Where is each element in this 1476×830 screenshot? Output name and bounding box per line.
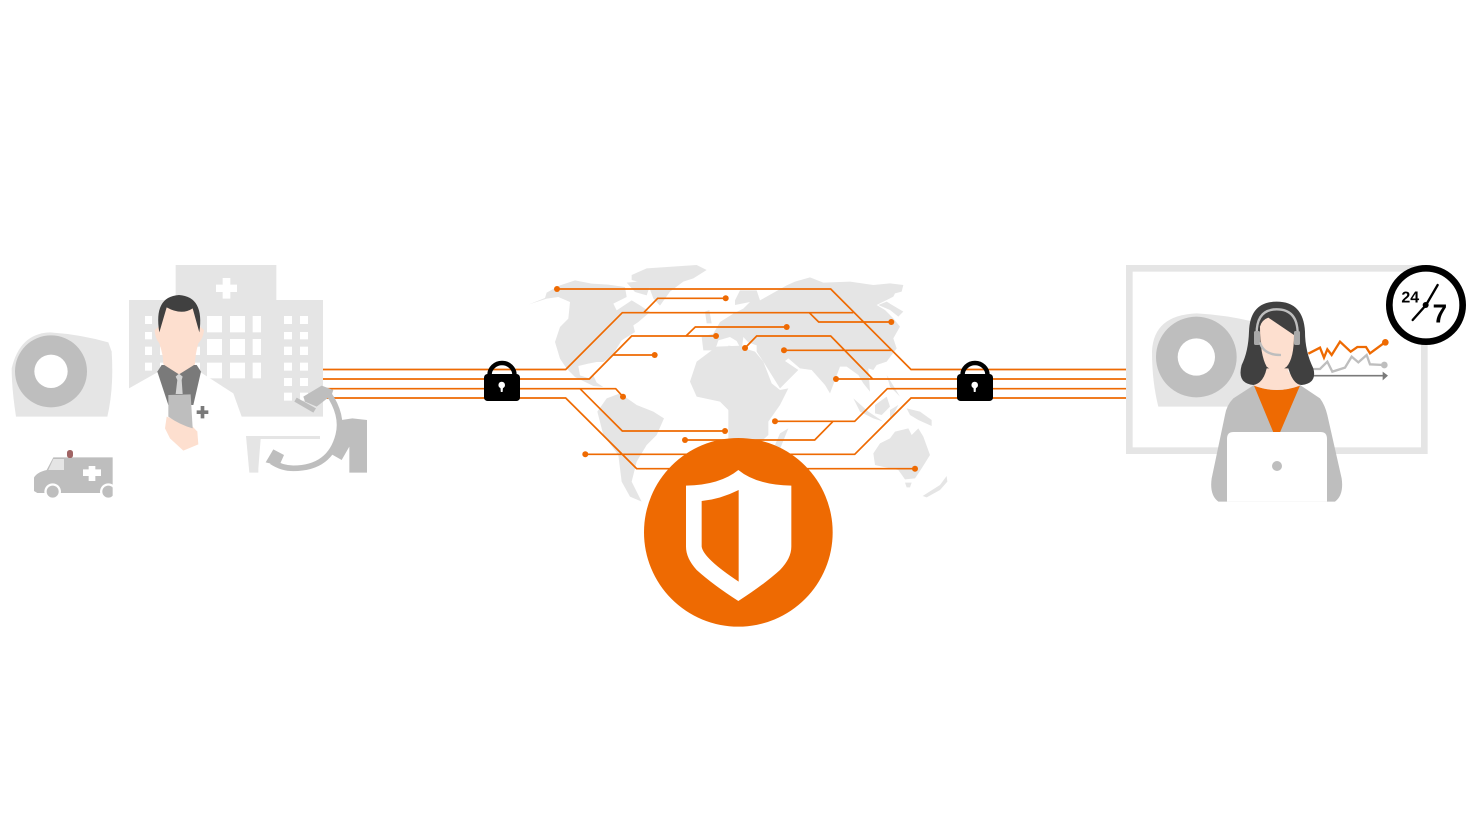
24/7 clock badge — [1389, 268, 1463, 342]
24/7 clock badge: 7 — [1433, 299, 1447, 329]
hospital building — [129, 265, 323, 417]
C-arm medical scanner — [246, 386, 367, 473]
monitor frame — [1129, 268, 1424, 451]
doctor — [113, 295, 250, 502]
connection lines — [323, 286, 1126, 472]
ambulance — [34, 450, 117, 500]
world map — [529, 265, 947, 502]
left illustration: hospital, doctor, MRI, ambulance — [12, 265, 323, 502]
left padlock — [484, 363, 520, 401]
right padlock — [957, 363, 993, 401]
24/7 clock badge: 24 — [1401, 290, 1419, 307]
security shield badge — [644, 438, 833, 627]
operator with headset and laptop — [1211, 302, 1342, 502]
right illustration: monitoring operator — [1129, 268, 1463, 502]
MRI scanner on screen — [1152, 313, 1260, 407]
vital signs chart — [1308, 339, 1389, 380]
MRI scanner — [12, 332, 112, 417]
